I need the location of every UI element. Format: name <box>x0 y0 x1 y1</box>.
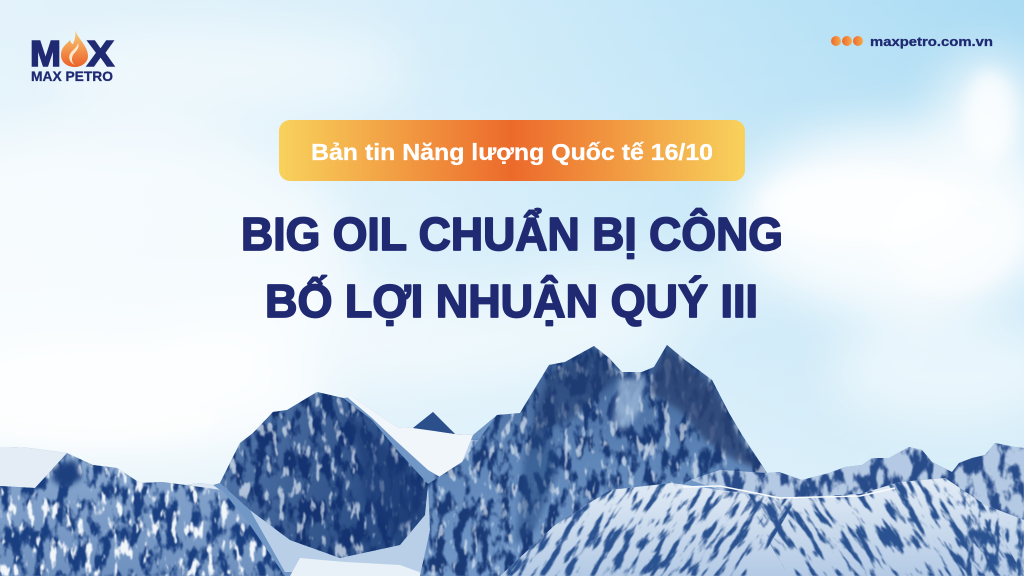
lower left dark face <box>515 420 558 545</box>
title line 1: BIG OIL CHUẨN BỊ CÔNG <box>241 208 783 260</box>
ridge highlight <box>683 486 895 498</box>
logo: Max Petro <box>30 30 114 84</box>
mountain range <box>0 340 1024 576</box>
upper peak dark face <box>530 350 620 455</box>
right distant ridge <box>690 443 1024 520</box>
website link <box>831 34 993 49</box>
twin peak dark face <box>650 350 760 470</box>
big left peak <box>215 390 435 560</box>
left snowfield <box>0 447 67 488</box>
front snowy ridge <box>500 478 1024 576</box>
shadow face of left peak <box>345 410 425 535</box>
banner text: Bản tin Năng lượng Quốc tế 16/10 <box>311 139 713 165</box>
left range <box>0 450 290 576</box>
website url: maxpetro.com.vn <box>870 34 993 49</box>
logo letter X: X <box>87 33 114 74</box>
title <box>241 208 783 327</box>
logo wordmark: MAX PETRO <box>31 68 113 84</box>
pale ice couloir <box>612 378 645 430</box>
snow slope below left peak <box>250 430 490 576</box>
date banner <box>279 120 745 181</box>
back mountain silhouette <box>0 345 1024 576</box>
small peak <box>413 412 455 434</box>
icon: three dots <box>831 36 863 46</box>
central massif <box>420 340 770 576</box>
dark outcrop <box>52 460 82 488</box>
glacier between peaks <box>347 397 473 477</box>
logo letter M: M <box>30 33 61 74</box>
title line 2: BỐ LỢI NHUẬN QUÝ III <box>265 275 758 327</box>
icon: flame <box>61 30 88 67</box>
distant ridge <box>163 482 220 498</box>
